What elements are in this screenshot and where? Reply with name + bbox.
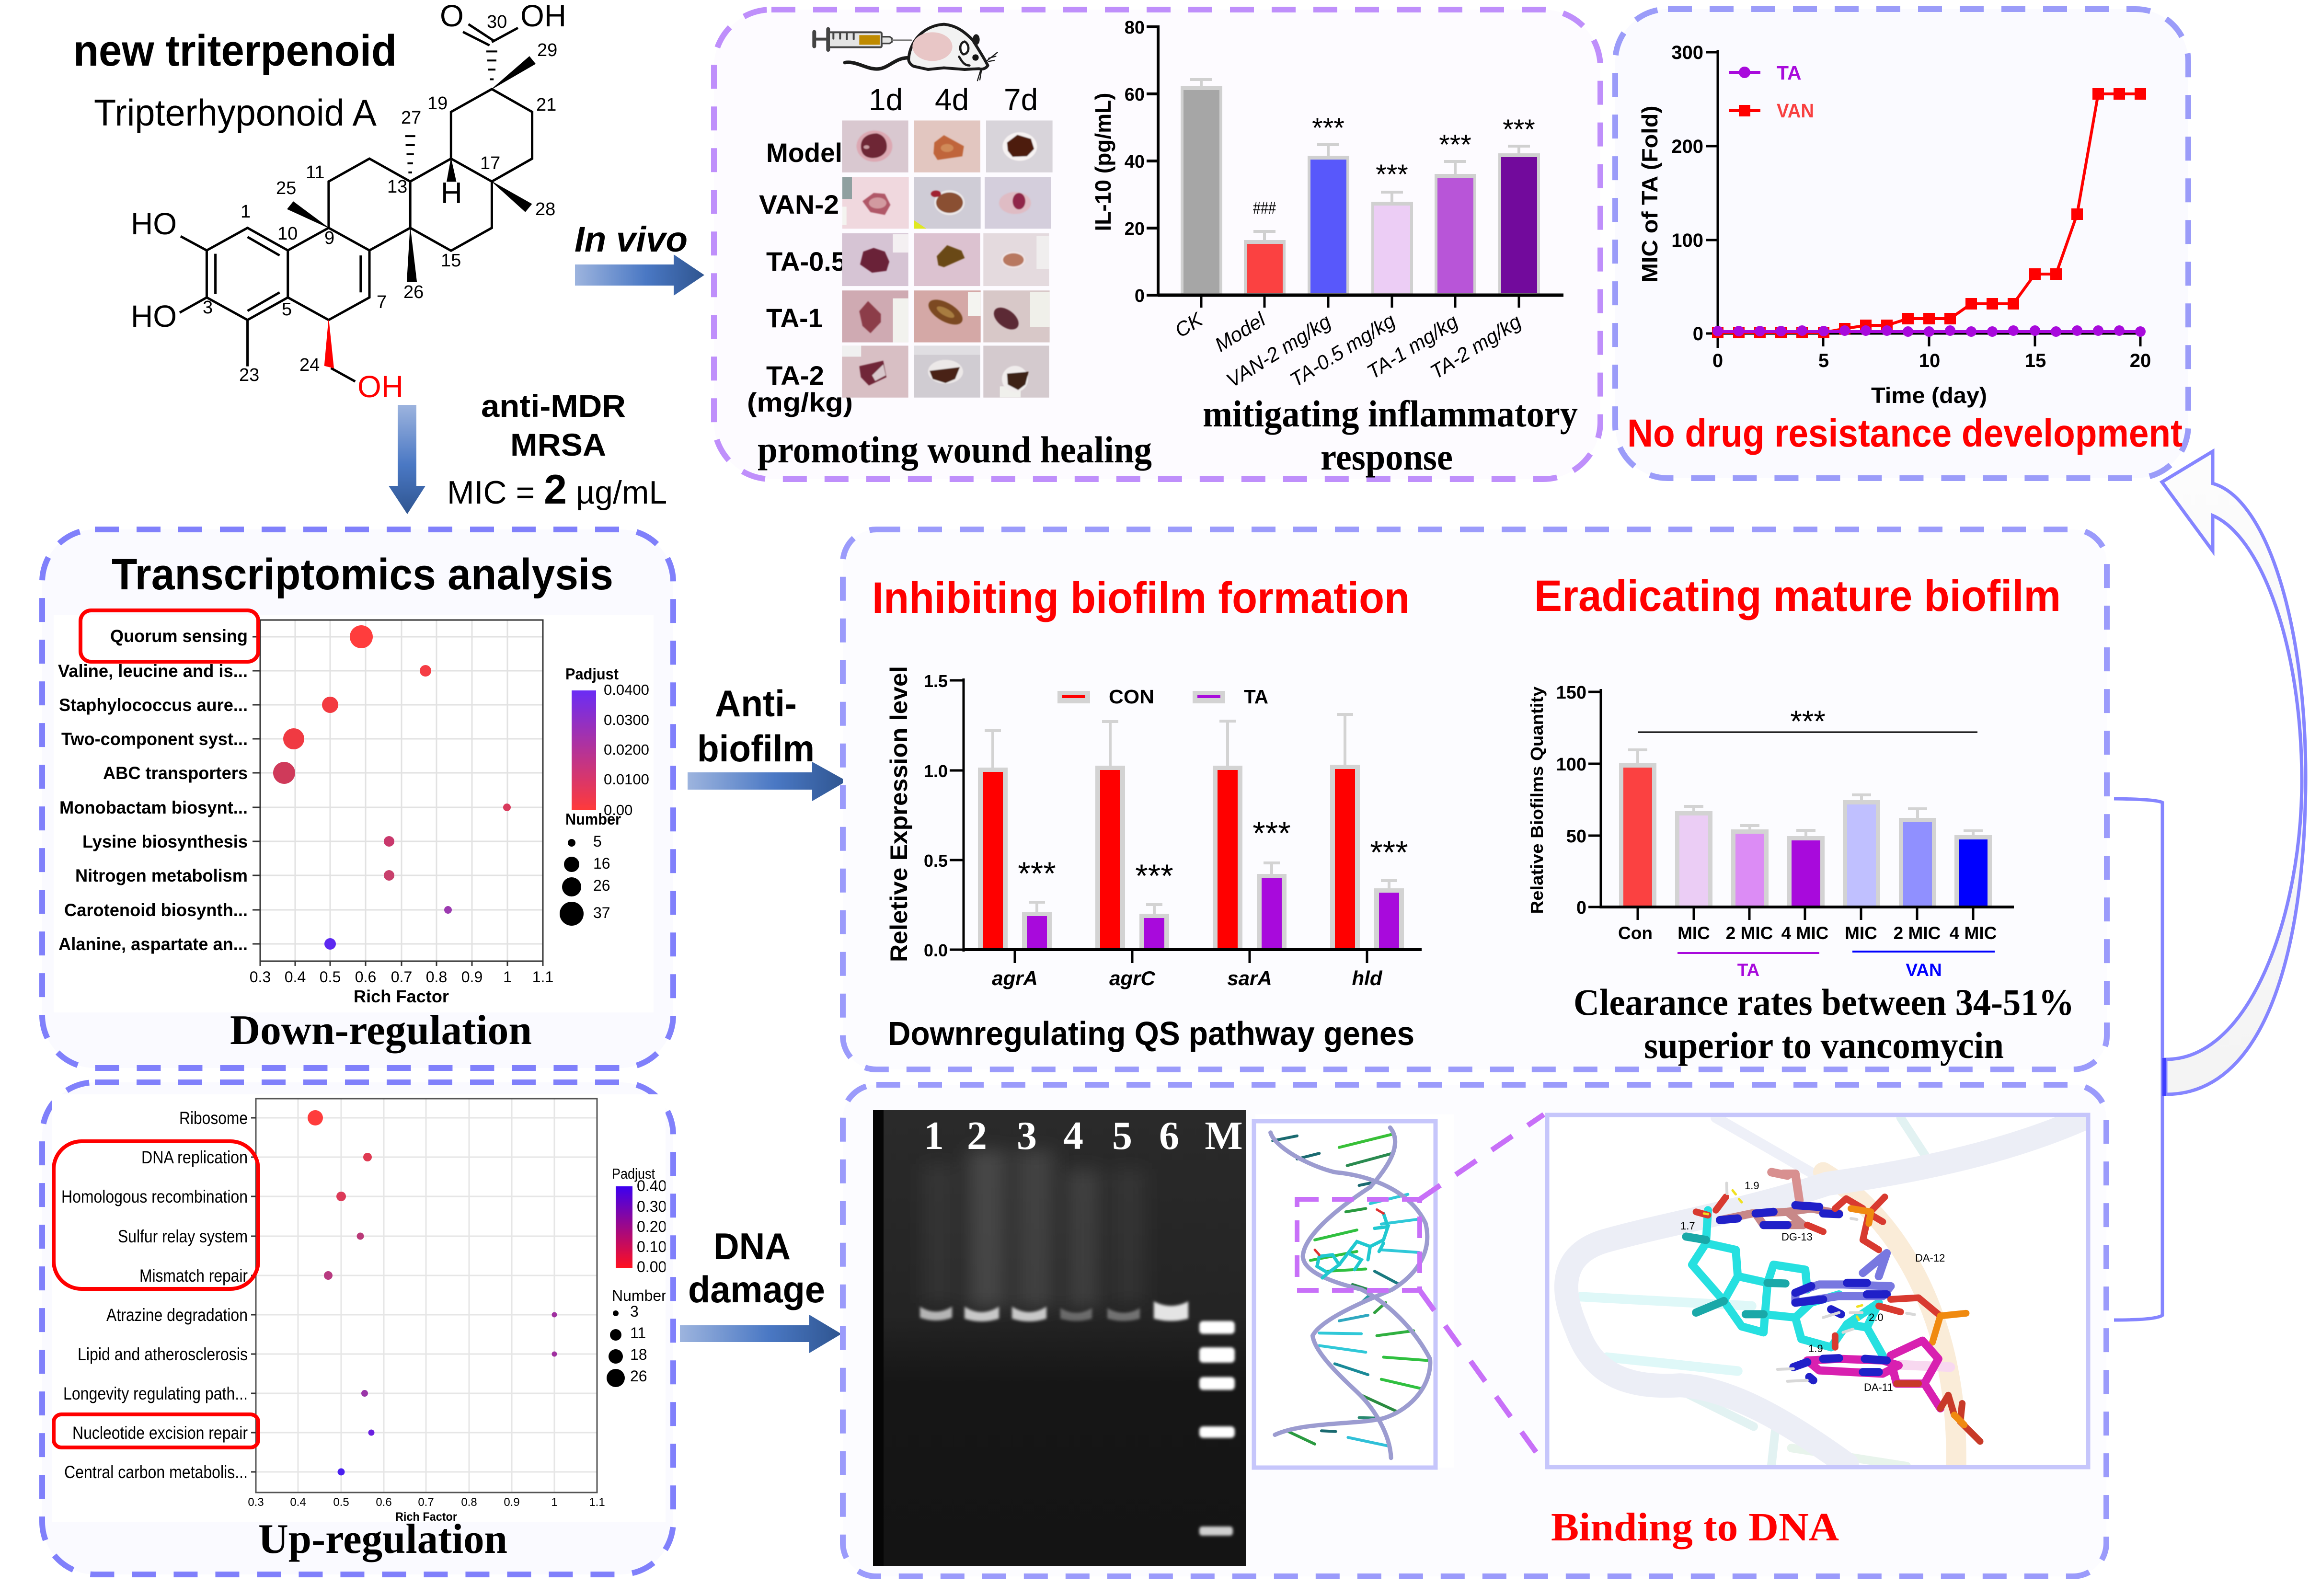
panel: biofilm xyxy=(843,529,2107,1069)
legend: padjust and number: Number xyxy=(612,1287,666,1304)
panel: no drug resistance xyxy=(1615,9,2188,478)
molecular docking view: 1.7 xyxy=(1680,1220,1695,1232)
compound name: Tripterhyponoid A xyxy=(94,92,377,134)
treatment labels xyxy=(747,138,853,417)
bar chart: QS genes: CON xyxy=(1109,686,1154,708)
bar chart: IL-10: *** xyxy=(1376,159,1408,190)
line chart: MIC fold over time: 10 xyxy=(1919,350,1940,371)
line chart: MIC fold over time: MIC of TA (Fold) xyxy=(1637,105,1662,283)
bar chart: IL-10: TA-2 mg/kg xyxy=(1426,310,1525,383)
bubble chart: up-regulated pathways: 0.9 xyxy=(504,1496,520,1509)
bar chart: IL-10: 20 xyxy=(1125,219,1145,239)
chemical structure: 25 xyxy=(276,178,296,198)
chemical structure: HO xyxy=(131,299,177,333)
bar chart: IL-10: IL-10 (pg/mL) xyxy=(1091,93,1115,231)
molecular docking view: DA-11 xyxy=(1864,1381,1893,1393)
bubble chart: up-regulated pathways: 1.1 xyxy=(589,1496,605,1509)
legend: padjust and number: 16 xyxy=(593,855,610,872)
bar chart: biofilm quantity: Con xyxy=(1618,923,1653,943)
legend: padjust and number: 26 xyxy=(593,877,610,894)
caption: up-regulation: Up-regulation xyxy=(258,1516,507,1562)
bubble chart: up-regulated pathways: Longevity regulating path... xyxy=(63,1384,248,1403)
line chart: MIC fold over time: 20 xyxy=(2130,350,2151,371)
chemical structure: 29 xyxy=(537,40,557,60)
day labels xyxy=(869,82,1038,117)
bubble chart: up-regulated pathways: Ribosome xyxy=(179,1108,248,1128)
bubble chart: up-regulated pathways: Homologous recombination xyxy=(61,1187,248,1206)
bar chart: biofilm quantity: 2 MIC xyxy=(1726,923,1773,943)
chemical structure: HO xyxy=(131,207,177,241)
chemical structure: 21 xyxy=(536,95,556,115)
day labels: 7d xyxy=(1004,82,1038,117)
bar chart: IL-10: *** xyxy=(1312,113,1344,144)
line chart: MIC fold over time: 300 xyxy=(1671,42,1703,63)
chemical structure: OH xyxy=(357,369,403,404)
caption: mitigating inflammatory response: mitigating inflammatory xyxy=(1203,393,1578,435)
bar chart: QS genes: *** xyxy=(1252,815,1291,851)
bubble chart: down-regulated pathways: Alanine, aspartate an... xyxy=(58,934,248,954)
legend: padjust and number: 18 xyxy=(630,1346,647,1363)
molecular docking view: DA-12 xyxy=(1915,1252,1945,1264)
caption: mitigating inflammatory response: response xyxy=(1321,436,1453,478)
chemical structure: 15 xyxy=(441,251,461,271)
bar chart: IL-10: CK xyxy=(1171,308,1207,342)
legend: padjust and number: Padjust xyxy=(565,665,619,683)
icon: syringe and mouse xyxy=(814,24,998,80)
line chart: MIC fold over time: VAN xyxy=(1777,100,1814,122)
gel electrophoresis image: 4 xyxy=(1063,1114,1083,1158)
bubble chart: down-regulated pathways: 0.7 xyxy=(391,968,412,986)
bar chart: QS genes: *** xyxy=(1018,855,1056,892)
bar chart: IL-10: 0 xyxy=(1135,286,1145,306)
legend: padjust and number: Number xyxy=(565,810,621,828)
chemical structure: 5 xyxy=(282,299,292,320)
bubble chart: down-regulated pathways: 0.8 xyxy=(426,968,447,986)
zoom box on helix xyxy=(1297,1199,1420,1290)
treatment labels: VAN-2 xyxy=(759,189,839,219)
bar chart: QS genes: Reletive Expression level xyxy=(885,666,912,962)
bubble chart: up-regulated pathways: 1 xyxy=(551,1496,558,1509)
legend: padjust and number: 11 xyxy=(630,1324,646,1342)
line chart: MIC fold over time: 15 xyxy=(2025,350,2046,371)
bar chart: QS genes: sarA xyxy=(1227,967,1272,989)
legend: padjust and number xyxy=(560,665,649,926)
gel electrophoresis image: 5 xyxy=(1112,1114,1132,1158)
chemical structure: 1 xyxy=(241,202,251,222)
legend: padjust and number: 0.100 xyxy=(637,1238,675,1255)
bar chart: QS genes: *** xyxy=(1135,858,1173,894)
panel: transcriptomics down-regulation xyxy=(42,529,673,1068)
title: new triterpenoid xyxy=(73,26,397,75)
bubble chart: up-regulated pathways: Rich Factor xyxy=(395,1510,457,1524)
line chart: MIC fold over time: Time (day) xyxy=(1871,383,1987,408)
bubble chart: down-regulated pathways: Valine, leucine and is... xyxy=(58,661,248,681)
caption: clearance rates: superior to vancomycin xyxy=(1644,1024,2004,1066)
bar chart: IL-10: *** xyxy=(1503,114,1535,145)
bubble chart: up-regulated pathways: Nucleotide excision repair xyxy=(72,1423,248,1443)
arrow: down to transcriptomics xyxy=(389,405,425,514)
line chart: MIC fold over time: 5 xyxy=(1818,350,1829,371)
legend: padjust and number: 0.0300 xyxy=(604,712,649,728)
bubble chart: down-regulated pathways: Rich Factor xyxy=(354,987,449,1006)
chemical structure xyxy=(131,0,566,404)
chemical structure: 23 xyxy=(239,365,259,385)
legend: padjust and number: 26 xyxy=(630,1367,647,1385)
chemical structure: 3 xyxy=(203,298,213,318)
line chart: MIC fold over time: 200 xyxy=(1671,136,1703,157)
legend: padjust and number: 0.200 xyxy=(637,1218,675,1235)
arrow: DNA damage: DNA xyxy=(713,1225,791,1267)
bubble chart: up-regulated pathways: Atrazine degradation xyxy=(106,1305,248,1325)
chemical structure: 9 xyxy=(324,228,334,248)
highlight: DNA repair pathways xyxy=(54,1141,258,1289)
caption: clearance rates xyxy=(1574,981,2074,1066)
caption: promoting wound healing: promoting wound healing xyxy=(758,429,1152,471)
line chart: MIC fold over time: 0 xyxy=(1693,323,1703,344)
panel: DNA binding xyxy=(843,1085,2106,1576)
activity label: MRSA xyxy=(510,427,606,462)
bubble chart: up-regulated pathways: 0.3 xyxy=(248,1496,264,1509)
bar chart: QS genes: 0.5 xyxy=(924,851,948,871)
gel electrophoresis image xyxy=(873,1110,1246,1566)
caption: mitigating inflammatory response xyxy=(1203,393,1578,478)
bar chart: QS genes: TA xyxy=(1244,686,1268,708)
gel electrophoresis image: 6 xyxy=(1159,1114,1179,1158)
chemical structure: H xyxy=(441,177,462,210)
bubble chart: down-regulated pathways: Two-component syst... xyxy=(61,729,248,749)
bubble chart: up-regulated pathways: 0.6 xyxy=(376,1496,392,1509)
chemical structure: 30 xyxy=(487,12,507,32)
legend: padjust and number: 0.0100 xyxy=(604,771,649,788)
legend: padjust and number: 0.0400 xyxy=(604,681,649,698)
caption: downregulating QS pathway genes: Downregulating QS pathway genes xyxy=(888,1015,1414,1052)
legend: padjust and number: 37 xyxy=(593,904,610,921)
bubble chart: down-regulated pathways: Monobactam biosynt... xyxy=(59,798,248,817)
treatment labels: Model xyxy=(766,138,842,168)
legend: padjust and number: 0.300 xyxy=(637,1198,675,1215)
chemical structure: 11 xyxy=(306,162,324,183)
caption: clearance rates: Clearance rates between 34-51% xyxy=(1574,981,2074,1023)
line chart: MIC fold over time xyxy=(1637,42,2151,408)
legend: padjust and number: 0.400 xyxy=(637,1177,675,1194)
bar chart: biofilm quantity: MIC xyxy=(1845,923,1877,943)
bar chart: biofilm quantity: Relative Biofilms Quantity xyxy=(1527,686,1547,914)
bubble chart: down-regulated pathways: 1 xyxy=(503,968,512,986)
molecular docking view: 1.9 xyxy=(1808,1343,1823,1355)
chemical structure: 7 xyxy=(377,292,387,312)
arrow: DNA damage xyxy=(680,1225,841,1353)
bar chart: biofilm quantity: VAN xyxy=(1906,960,1942,980)
bar chart: IL-10 xyxy=(1091,18,1563,392)
gel electrophoresis image: 1 xyxy=(924,1114,944,1158)
bar chart: QS genes: agrC xyxy=(1109,967,1156,989)
bar chart: IL-10: *** xyxy=(1439,129,1471,161)
bar chart: IL-10: VAN-2 mg/kg xyxy=(1222,310,1335,392)
bar chart: biofilm quantity: 2 MIC xyxy=(1894,923,1941,943)
heading: eradicating mature biofilm: Eradicating mature biofilm xyxy=(1534,572,2061,620)
legend: padjust and number: 0.0200 xyxy=(604,741,649,758)
bubble chart: down-regulated pathways: 0.4 xyxy=(285,968,306,986)
bubble chart: down-regulated pathways: Nitrogen metabolism xyxy=(75,866,248,885)
bubble chart: down-regulated pathways: 0.5 xyxy=(320,968,341,986)
bar chart: QS genes: hld xyxy=(1352,967,1383,989)
activity label: anti-MDR xyxy=(481,388,626,424)
bubble chart: up-regulated pathways xyxy=(52,1094,675,1524)
legend: padjust and number: 5 xyxy=(593,833,602,850)
legend: padjust and number xyxy=(607,1168,666,1387)
arrow: anti-biofilm: biofilm xyxy=(697,727,815,769)
bubble chart: up-regulated pathways: Mismatch repair xyxy=(139,1266,248,1286)
panel: compound structure xyxy=(73,0,667,513)
heading: Transcriptomics analysis xyxy=(112,550,613,599)
bar chart: biofilm quantity: 4 MIC xyxy=(1781,923,1828,943)
bar chart: QS genes: 1.0 xyxy=(924,761,948,781)
arrow: in vivo xyxy=(575,219,704,296)
bar chart: biofilm quantity: MIC xyxy=(1678,923,1710,943)
bubble chart: up-regulated pathways: 0.5 xyxy=(333,1496,349,1509)
chemical structure: 27 xyxy=(401,108,421,128)
chemical structure: 19 xyxy=(427,93,448,114)
bar chart: biofilm quantity: 50 xyxy=(1566,827,1586,847)
chemical structure: 10 xyxy=(277,224,298,244)
bar chart: QS genes: 1.5 xyxy=(924,671,948,691)
bubble chart: down-regulated pathways: Carotenoid biosynth... xyxy=(64,900,248,920)
treatment labels: (mg/kg) xyxy=(747,387,853,417)
bar chart: IL-10: ### xyxy=(1253,198,1276,218)
gel electrophoresis image: M xyxy=(1205,1114,1243,1158)
bubble chart: down-regulated pathways: 0.9 xyxy=(461,968,483,986)
molecular docking view: 2.0 xyxy=(1869,1311,1884,1323)
highlight: nucleotide excision repair xyxy=(54,1414,258,1447)
caption: binding to DNA: Binding to DNA xyxy=(1551,1505,1839,1550)
bar chart: biofilm quantity: 150 xyxy=(1556,683,1586,703)
chemical structure: 26 xyxy=(403,282,424,302)
bubble chart: down-regulated pathways: 1.1 xyxy=(532,968,553,986)
bubble chart: up-regulated pathways: Lipid and atherosclerosis xyxy=(78,1344,248,1364)
gel electrophoresis image: 2 xyxy=(967,1114,987,1158)
legend: padjust and number: 0.00 xyxy=(604,802,632,818)
heading: inhibiting biofilm formation: Inhibiting biofilm formation xyxy=(872,574,1410,622)
bubble chart: down-regulated pathways: Quorum sensing xyxy=(110,626,248,646)
bar chart: biofilm quantity: 100 xyxy=(1556,755,1586,775)
bubble chart: up-regulated pathways: 0.4 xyxy=(290,1496,306,1509)
line chart: MIC fold over time: TA xyxy=(1777,62,1802,84)
bar chart: QS genes: 0.0 xyxy=(924,941,948,960)
legend: padjust and number: 0.00 xyxy=(637,1258,666,1275)
molecular docking view: DG-13 xyxy=(1781,1231,1813,1243)
treatment labels: TA-2 xyxy=(766,360,824,390)
bar chart: QS genes xyxy=(885,666,1422,989)
wound photographs xyxy=(842,120,1053,398)
curved arrow from biofilm and DNA panels to resistance panel xyxy=(2114,451,2306,1320)
treatment labels: TA-1 xyxy=(766,303,823,333)
DNA helix with bound ligand xyxy=(1254,1114,1454,1468)
line chart: MIC fold over time: 100 xyxy=(1671,230,1703,251)
activity label xyxy=(447,388,667,513)
day labels: 1d xyxy=(869,82,903,117)
bubble chart: down-regulated pathways: 0.6 xyxy=(355,968,376,986)
bar chart: IL-10: 80 xyxy=(1125,18,1145,38)
day labels: 4d xyxy=(935,82,969,117)
arrow: in vivo: In vivo xyxy=(575,219,688,259)
bar chart: biofilm quantity: TA xyxy=(1737,960,1759,980)
arrow: DNA damage: damage xyxy=(688,1268,825,1310)
bubble chart: up-regulated pathways: 0.8 xyxy=(461,1496,477,1509)
bar chart: biofilm quantity: *** xyxy=(1790,705,1826,738)
bubble chart: up-regulated pathways: Sulfur relay system xyxy=(118,1227,248,1246)
bubble chart: down-regulated pathways: Lysine biosynthesis xyxy=(82,832,248,851)
zoom connector lines xyxy=(1420,1114,1547,1468)
legend: padjust and number: 3 xyxy=(630,1303,639,1320)
bar chart: biofilm quantity xyxy=(1527,683,2014,980)
panel: up-regulation xyxy=(42,1082,675,1574)
chemical structure: 17 xyxy=(480,153,500,173)
molecular docking view xyxy=(1547,1115,2088,1467)
bubble chart: down-regulated pathways xyxy=(54,610,654,1012)
caption: down-regulation: Down-regulation xyxy=(230,1007,532,1054)
gel electrophoresis image: 3 xyxy=(1017,1114,1037,1158)
bubble chart: down-regulated pathways: ABC transporters xyxy=(103,763,248,783)
bar chart: IL-10: 40 xyxy=(1125,152,1145,172)
bubble chart: down-regulated pathways: Staphylococcus aure... xyxy=(59,695,248,715)
panel: in vivo xyxy=(714,10,1600,479)
molecular docking view: 1.9 xyxy=(1745,1180,1759,1192)
arrow: anti-biofilm: Anti- xyxy=(715,682,797,724)
arrow: anti-biofilm xyxy=(688,682,847,801)
caption: no drug resistance development: No drug resistance development xyxy=(1627,412,2183,455)
highlight: quorum sensing xyxy=(80,610,258,662)
chemical structure: 13 xyxy=(387,177,407,197)
chemical structure: 24 xyxy=(299,355,320,375)
bubble chart: up-regulated pathways: DNA replication xyxy=(141,1148,248,1167)
bubble chart: up-regulated pathways: 0.7 xyxy=(418,1496,434,1509)
bar chart: IL-10: TA-0.5 mg/kg xyxy=(1286,309,1399,391)
bar chart: IL-10: TA-1 mg/kg xyxy=(1363,310,1462,383)
bar chart: QS genes: agrA xyxy=(992,967,1038,989)
bar chart: biofilm quantity: 4 MIC xyxy=(1950,923,1997,943)
bar chart: IL-10: Model xyxy=(1211,308,1270,356)
bubble chart: up-regulated pathways: Central carbon metabolis... xyxy=(64,1462,248,1482)
bar chart: IL-10: 60 xyxy=(1125,85,1145,105)
bar chart: biofilm quantity: 0 xyxy=(1576,898,1586,918)
legend: padjust and number: Padjust xyxy=(612,1165,655,1182)
treatment labels: TA-0.5 xyxy=(766,246,846,276)
activity label: MIC = 2 µg/mL xyxy=(447,467,667,513)
chemical structure: 28 xyxy=(535,199,555,219)
bubble chart: down-regulated pathways: 0.3 xyxy=(250,968,271,986)
bar chart: QS genes: *** xyxy=(1370,834,1408,871)
line chart: MIC fold over time: 0 xyxy=(1712,350,1723,371)
